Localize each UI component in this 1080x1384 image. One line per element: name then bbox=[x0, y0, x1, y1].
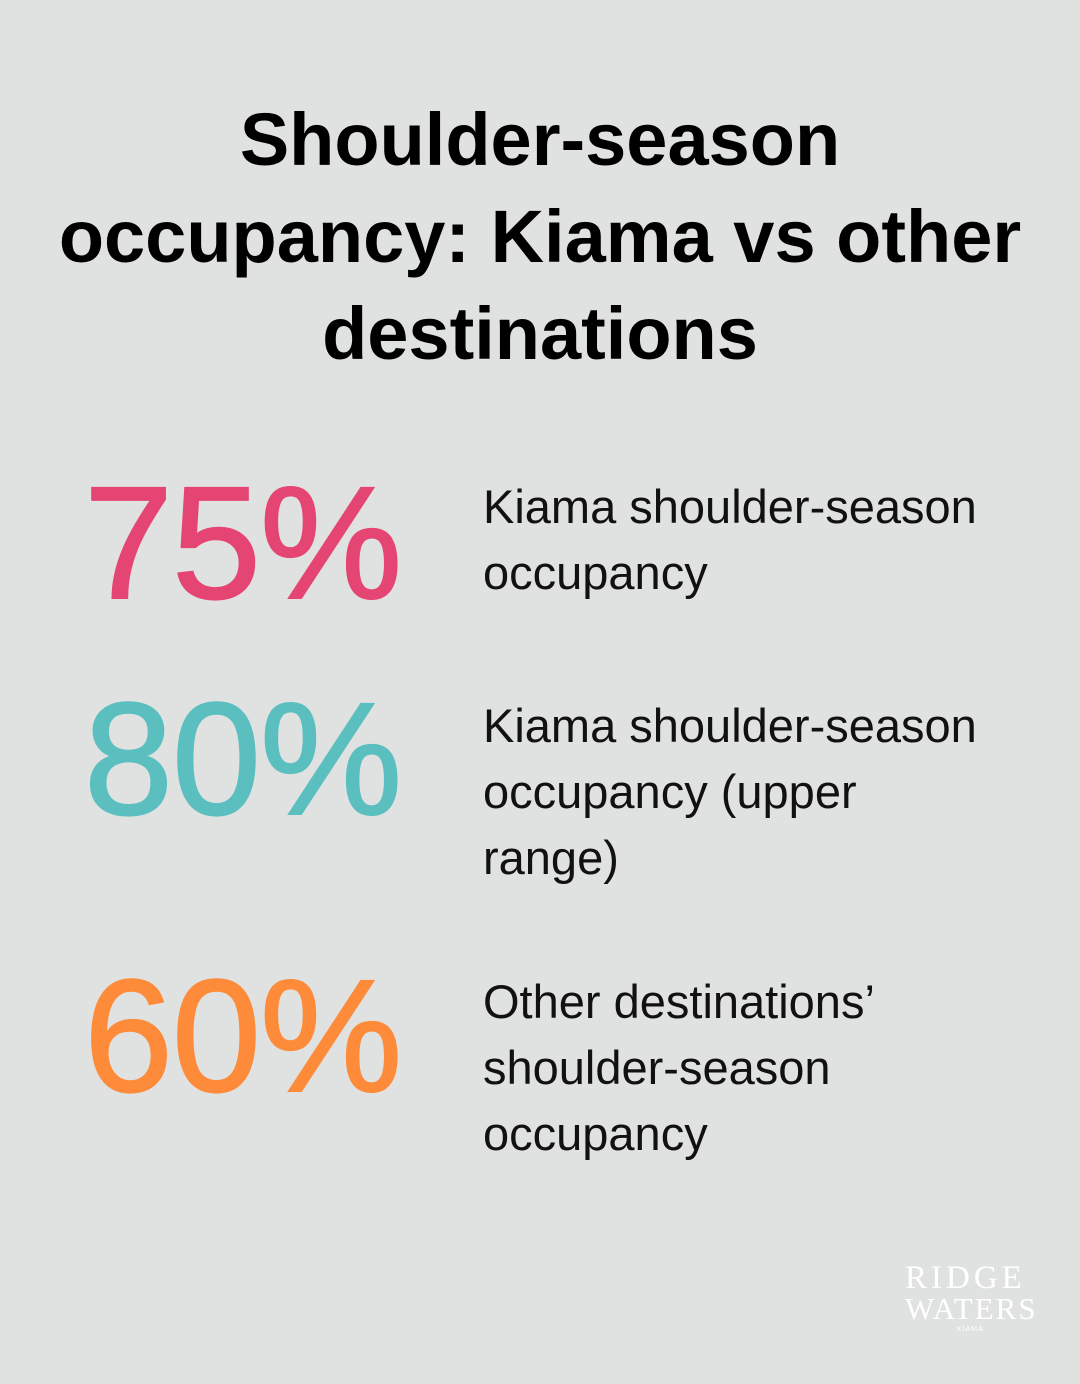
title: Shoulder-season bbox=[240, 98, 840, 181]
stat 1 description bbox=[483, 480, 977, 599]
title: destinations bbox=[322, 292, 758, 375]
stat 2 description: occupancy (upper bbox=[483, 765, 857, 818]
stat 2 description: Kiama shoulder-season bbox=[483, 699, 977, 752]
logo: RIDGE bbox=[905, 1260, 1026, 1296]
stat 3 description: shoulder-season bbox=[483, 1041, 830, 1094]
stat 2 description bbox=[483, 699, 977, 884]
logo: WATERS bbox=[905, 1291, 1038, 1326]
stat 3 description: occupancy bbox=[483, 1107, 708, 1160]
logo bbox=[905, 1260, 1038, 1333]
stat 3 description: Other destinations’ bbox=[483, 975, 875, 1028]
stat 2 number: 80% bbox=[84, 669, 401, 848]
logo: KIAMA bbox=[957, 1326, 984, 1333]
stat 3 description bbox=[483, 975, 875, 1160]
stat 1 description: occupancy bbox=[483, 546, 708, 599]
stat 2 description: range) bbox=[483, 831, 619, 884]
stat 1 number: 75% bbox=[84, 453, 401, 632]
title bbox=[59, 98, 1021, 375]
stat 1 description: Kiama shoulder-season bbox=[483, 480, 977, 533]
stat 3 number: 60% bbox=[84, 946, 401, 1125]
title: occupancy: Kiama vs other bbox=[59, 195, 1021, 278]
